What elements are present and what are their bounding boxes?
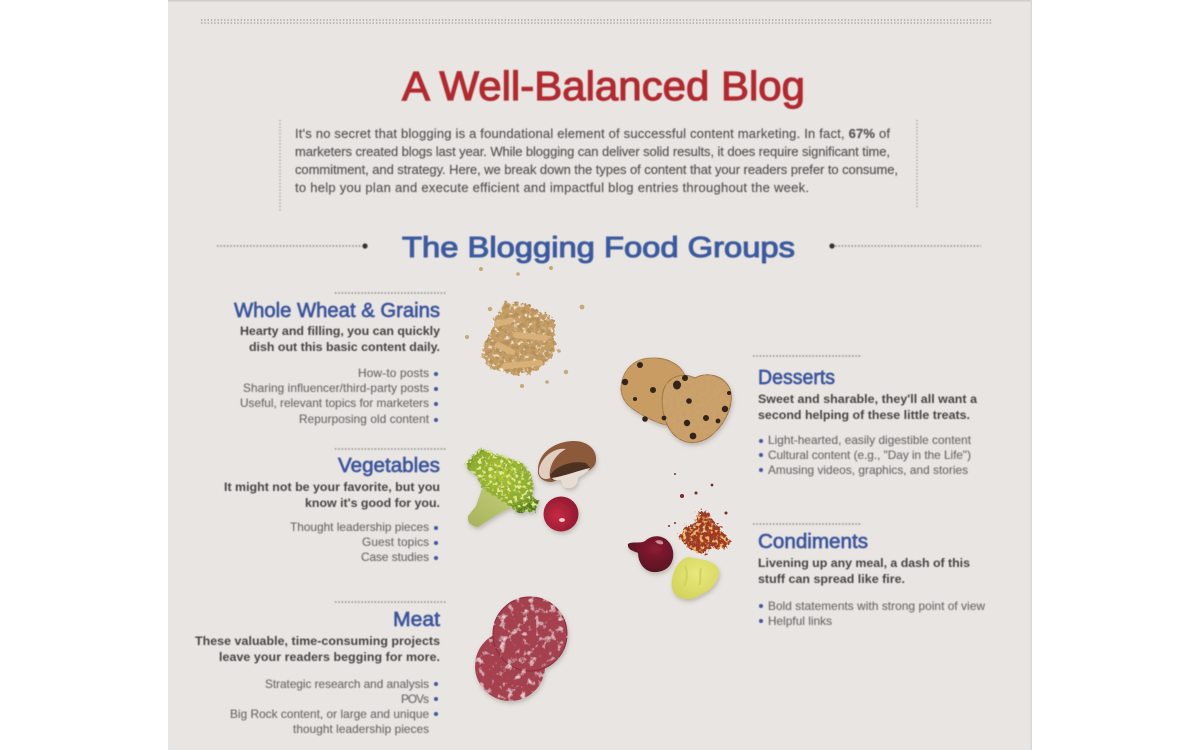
panel: whole wheat and grains: Sharing influencer/third-party posts xyxy=(243,381,429,395)
panel: desserts: second helping of these little treats. xyxy=(758,408,970,422)
icon: salami xyxy=(475,597,567,701)
heading: meat: Meat xyxy=(393,609,440,631)
panel: desserts: Amusing videos, graphics, and stories xyxy=(768,463,968,477)
icon: radish xyxy=(544,496,578,532)
panel: whole wheat and grains: How-to posts xyxy=(358,366,429,380)
panel: meat: Strategic research and analysis xyxy=(265,677,429,691)
panel: meat: POVs xyxy=(401,692,429,706)
panel: desserts xyxy=(753,356,977,477)
panel: vegetables: It might not be your favorite, but you xyxy=(224,480,440,494)
intro paragraph xyxy=(280,120,917,212)
icon: mushroom xyxy=(538,441,596,488)
panel: vegetables: Guest topics xyxy=(362,535,429,549)
intro paragraph: marketers created blogs last year. While blogging can deliver solid results, it does require significant time, xyxy=(295,144,890,159)
panel: vegetables xyxy=(224,449,447,564)
icon: mustard xyxy=(672,557,719,599)
icon: ketchup xyxy=(628,536,673,572)
panel: meat xyxy=(195,602,447,736)
background panel xyxy=(168,0,1032,750)
panel: whole wheat and grains xyxy=(234,293,447,426)
panel: condiments: stuff can spread like fire. xyxy=(758,572,905,586)
panel: whole wheat and grains: Repurposing old content xyxy=(299,412,430,426)
panel: meat: These valuable, time-consuming projects xyxy=(195,634,440,648)
panel: vegetables: Thought leadership pieces xyxy=(290,520,429,534)
heading: vegetables: Vegetables xyxy=(338,455,440,477)
panel: vegetables: know it's good for you. xyxy=(305,496,440,510)
intro paragraph: It's no secret that blogging is a foundational element of successful content marketing. In fact, 67% of xyxy=(295,126,890,141)
title: A Well-Balanced Blog xyxy=(402,63,805,109)
panel: meat: leave your readers begging for more. xyxy=(219,650,440,664)
panel: desserts: Light-hearted, easily digestible content xyxy=(768,433,972,447)
panel: condiments: Livening up any meal, a dash of this xyxy=(758,556,970,570)
icon: chocolate chip cookies xyxy=(621,358,731,443)
panel: meat: thought leadership pieces xyxy=(293,722,429,736)
heading: condiments: Condiments xyxy=(758,531,868,553)
panel: condiments: Helpful links xyxy=(768,614,832,628)
icon: grains and pasta xyxy=(465,266,584,388)
heading: desserts: Desserts xyxy=(758,367,835,389)
section heading: The Blogging Food Groups xyxy=(402,232,795,264)
panel: vegetables: Case studies xyxy=(361,550,429,564)
heading: whole wheat: Whole Wheat & Grains xyxy=(234,300,440,322)
icon: broccoli xyxy=(465,448,539,527)
section heading xyxy=(217,232,981,264)
panel: condiments xyxy=(753,524,985,628)
panel: whole wheat and grains: Useful, relevant topics for marketers xyxy=(240,396,429,410)
panel: condiments: Bold statements with strong point of view xyxy=(768,599,985,613)
icon: chili flakes xyxy=(668,473,730,554)
panel: whole wheat and grains: Hearty and filling, you can quickly xyxy=(240,324,440,338)
panel: desserts: Cultural content (e.g., "Day in the Life") xyxy=(768,448,971,462)
intro paragraph: to help you plan and execute efficient and impactful blog entries throughout the week. xyxy=(295,180,809,195)
panel: meat: Big Rock content, or large and unique xyxy=(230,707,429,721)
intro paragraph: commitment, and strategy. Here, we break down the types of content that your readers prefer to consume, xyxy=(295,162,898,177)
panel: desserts: Sweet and sharable, they'll all want a xyxy=(758,392,977,406)
panel: whole wheat and grains: dish out this basic content daily. xyxy=(249,340,440,354)
